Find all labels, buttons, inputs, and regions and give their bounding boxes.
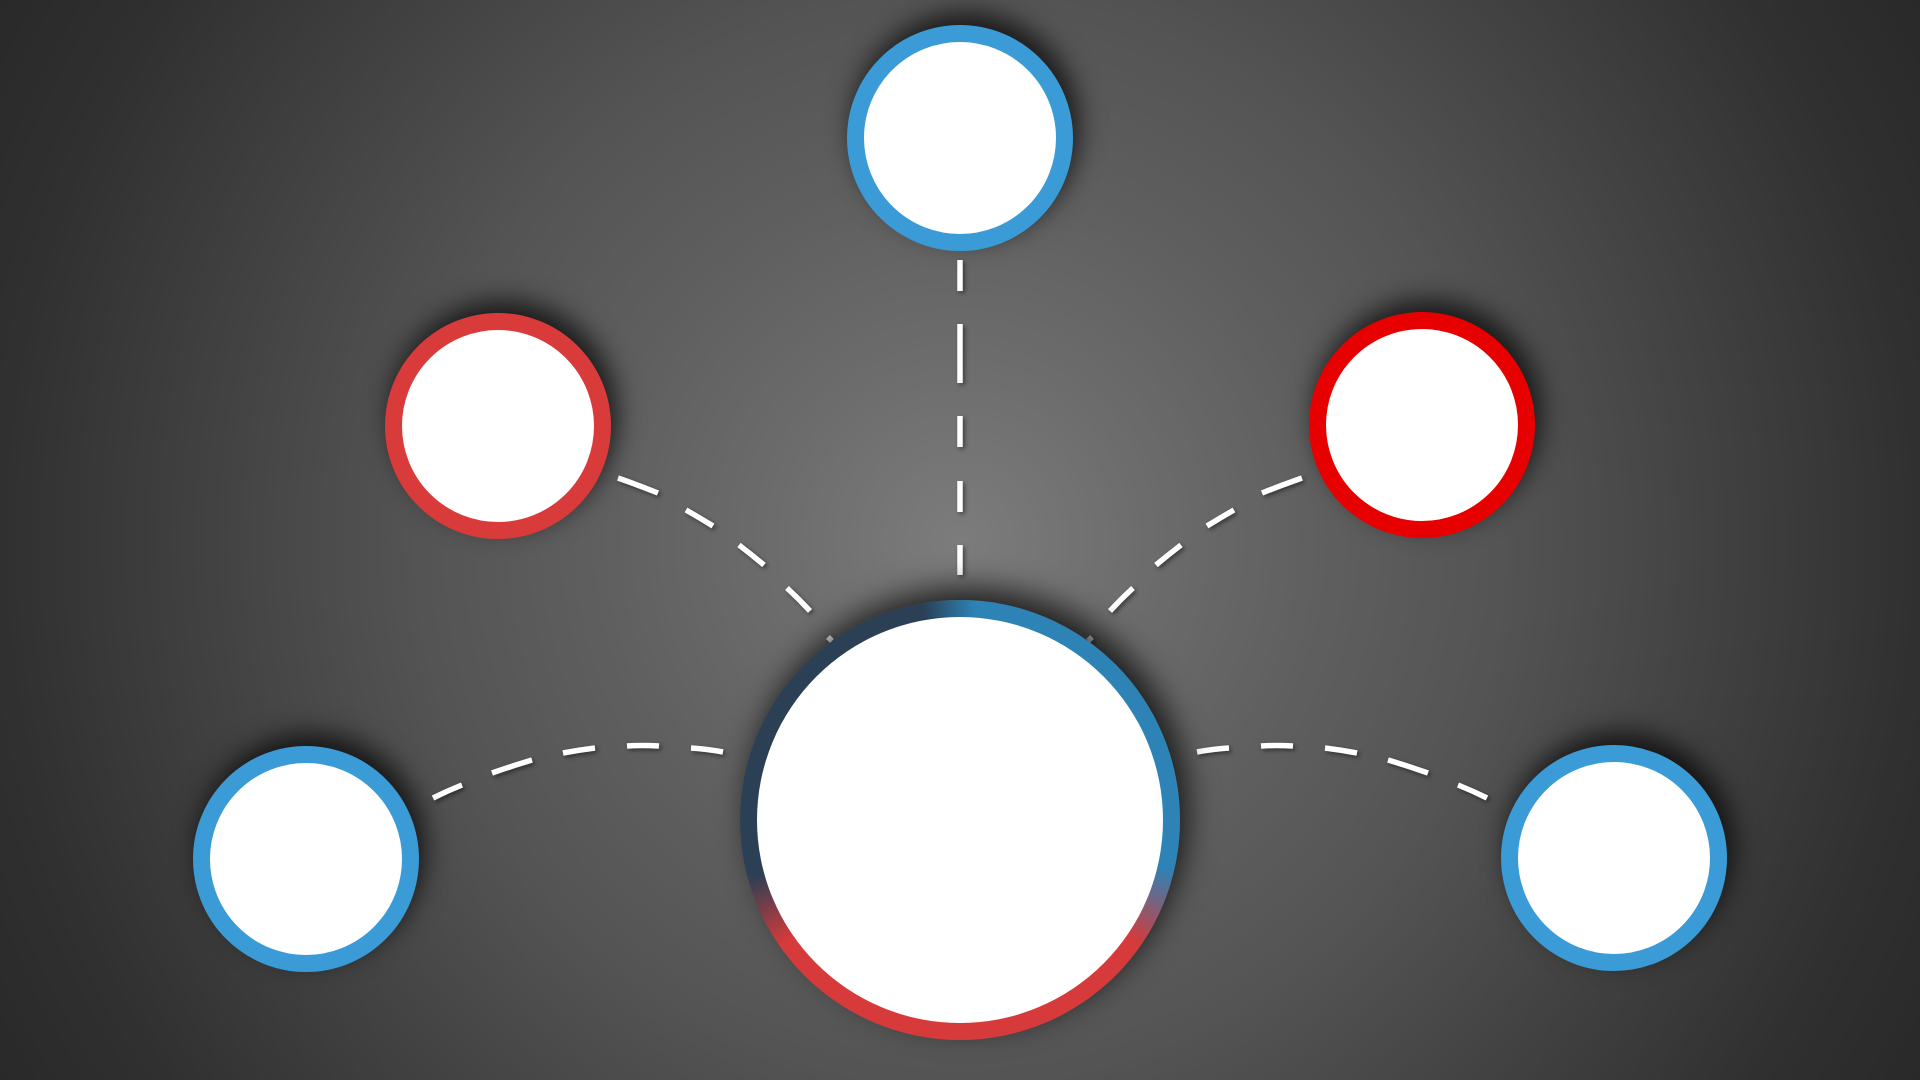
upper right node xyxy=(1309,312,1535,538)
top node xyxy=(847,25,1073,251)
lower left node xyxy=(193,746,419,972)
lower right node xyxy=(1501,745,1727,971)
upper left node xyxy=(385,313,611,539)
central hub node xyxy=(740,600,1180,1040)
